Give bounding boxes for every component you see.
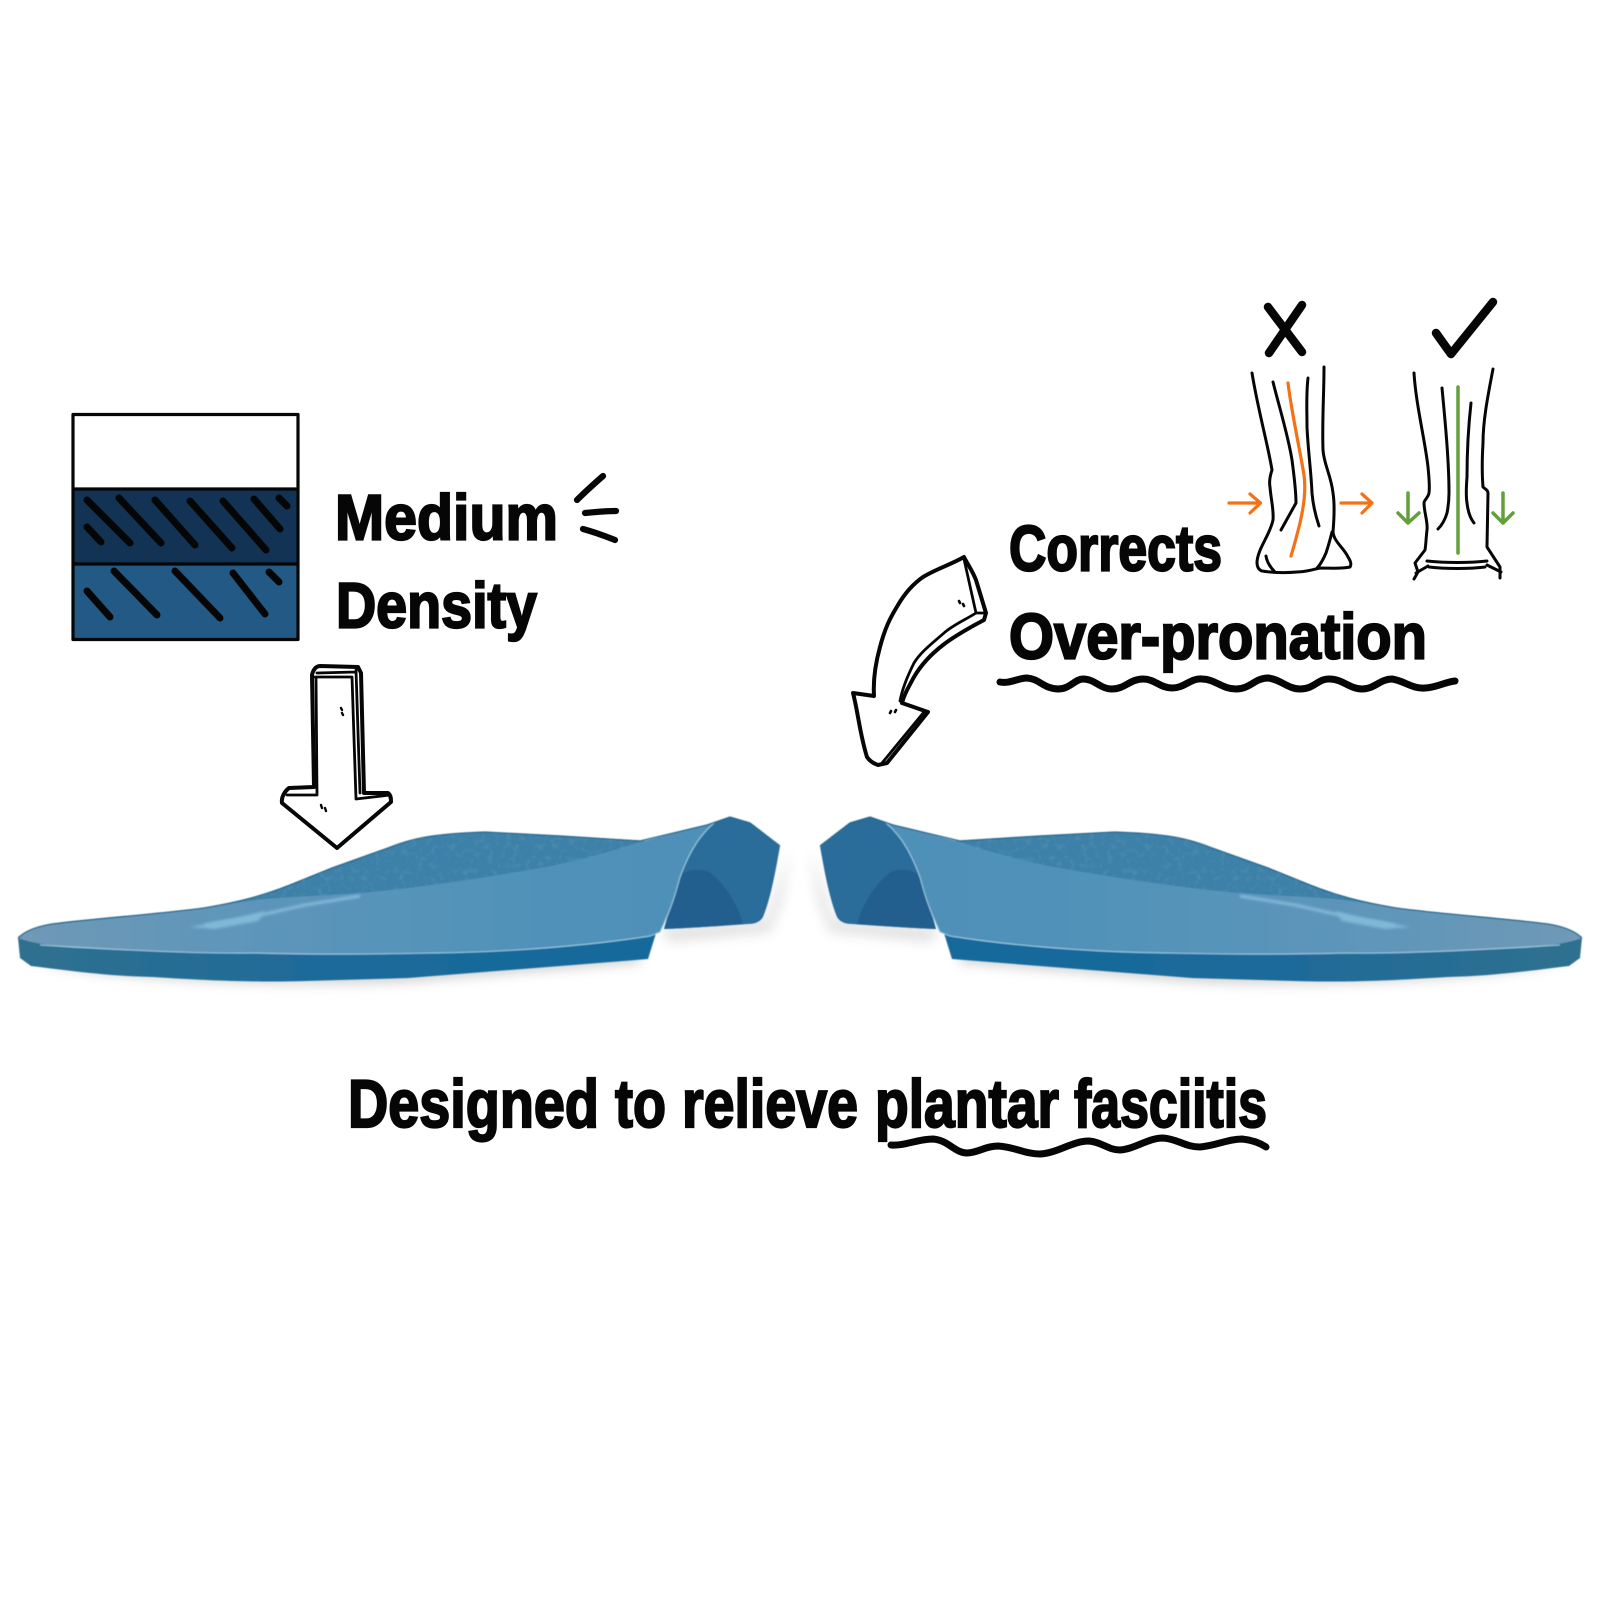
arrow: curved arrow [853,557,986,765]
icon: emphasis burst lines [577,476,616,540]
caption: designed to relieve plantar fasciitis: Designed [348,1066,599,1142]
icon: X mark [1268,305,1302,353]
heading: Medium Density: Density [336,570,537,642]
green alignment line [1456,387,1460,553]
hatching light layer [87,571,279,618]
heading: Corrects Over-pronation [1009,512,1427,672]
heading: Corrects Over-pronation: Corrects [1009,512,1222,584]
wavy underline: over-pronation [1000,678,1455,689]
caption: designed to relieve plantar fasciitis: plantar [875,1066,1059,1142]
panel: density layers [73,414,298,640]
heading: Medium Density [335,482,558,642]
caption: designed to relieve plantar fasciitis: to [615,1066,666,1142]
white top layer [74,414,298,490]
caption: designed to relieve plantar fasciitis: fasciitis [1074,1066,1267,1142]
layer box outline [73,414,298,640]
dark navy middle layer [74,489,298,564]
green arrows [1398,493,1513,523]
arrow: straight down arrow [282,666,391,848]
icon: over-pronated ankle [1229,367,1372,573]
icon: corrected ankle [1398,369,1513,579]
orange alignment line [1288,383,1305,556]
hatching dark layer [87,498,287,550]
icon: check mark [1436,302,1493,354]
heading: Medium Density: Medium [335,482,558,554]
caption: designed to relieve plantar fasciitis [348,1066,1267,1142]
wavy underline: plantar fasciitis [891,1138,1266,1154]
insole: right [810,817,1582,983]
caption: designed to relieve plantar fasciitis: relieve [682,1066,858,1142]
orange arrows [1229,494,1372,513]
heading: Corrects Over-pronation: Over-pronation [1009,600,1427,672]
insole: left [18,817,790,983]
medium blue bottom layer [74,564,298,639]
